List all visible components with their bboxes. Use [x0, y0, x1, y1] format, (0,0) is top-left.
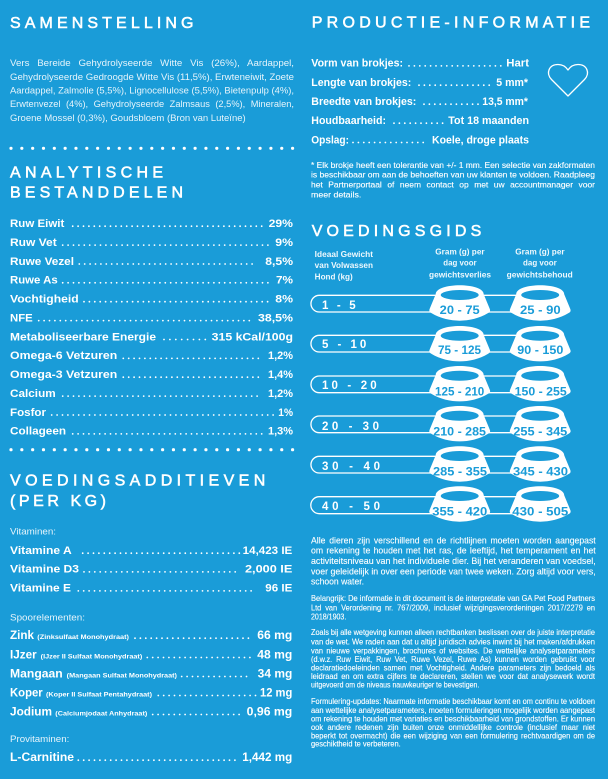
row: zink: (Zinksulfaat Monohydraat): [37, 634, 129, 641]
subheading: spoorelementen: Spoorelementen:: [10, 611, 85, 622]
row: breedte van brokjes: [311, 96, 529, 108]
row: opslag: Opslag:: [311, 134, 349, 146]
row: mangaan: Mangaan: [10, 666, 63, 680]
panel: voedingsgids: [311, 223, 573, 522]
text block: feeding advice: voer geleidelijk in over een periode van twee weken. Zorg altijd voor vers,: [311, 566, 596, 576]
row: 5-10 kg: [311, 326, 571, 361]
text block: legal notice: 2018/1903.: [311, 612, 346, 621]
row: jodium: Jodium: [10, 704, 52, 718]
row: houdbaarheid: Houdbaarheid:: [311, 115, 386, 127]
text block: feeding advice: Alle dieren zijn verschillend en de richtlijnen moeten worden aangepast: [311, 535, 596, 545]
row: opslag: Koele, droge plaats: [432, 134, 529, 146]
icon: heart kibble shape: [549, 64, 587, 96]
heading: samenstelling: SAMENSTELLING: [10, 15, 194, 32]
row: koper: (Koper II Sulfaat Pentahydraat): [46, 691, 152, 698]
row: ruw vet: [10, 237, 293, 249]
row: metaboliseerbare energie: 315 kCal/100g: [212, 331, 293, 343]
text block: feeding advice: om rekening te houden met het ras, de leeftijd, het temperament en het: [311, 546, 596, 556]
subheading: provitaminen: Provitaminen:: [10, 733, 69, 744]
heading: voedingsadditieven per kg: [10, 473, 265, 510]
row: ruw vet: Ruw Vet: [10, 237, 57, 249]
row: omega-6 vetzuren: 1,2%: [268, 350, 293, 362]
footnote: tolerance: * Elk brokje heeft een tolerantie van +/- 1 mm. Een selectie van zakformaten: [311, 161, 595, 170]
row: fosfor: Fosfor: [10, 407, 47, 419]
text block: legislation: leidraad en om extra cijfers te declareren, stellen we voor dat analysewerk wordt: [311, 672, 596, 681]
text block: formulation updates: beperkt tot overmacht) die een wijziging van een formulering rechtvaardigen om de: [311, 731, 596, 740]
row: jodium: 0,96 mg: [247, 704, 292, 718]
column header: weight loss: dag voor: [443, 258, 477, 267]
row: ruw vet: 9%: [275, 237, 293, 249]
text block: formulation updates: geschiktheid te verbeteren.: [311, 740, 401, 749]
row: ijzer: [10, 647, 292, 661]
column header: weight maintenance: Gram (g) per: [515, 247, 565, 256]
ingredients text: Gehydrolyseerde Gedroogde Witte Vis (11,5%), Erwteneiwit, Zoete: [10, 72, 294, 83]
row: mangaan: 34 mg: [258, 666, 292, 680]
text block: feeding advice: [311, 535, 596, 586]
row: koper: 12 mg: [260, 685, 292, 699]
row: 40-50 kg: 40 - 50: [322, 501, 380, 513]
row: vorm van brokjes: Hart: [506, 58, 529, 70]
panel: samenstelling: [10, 15, 294, 124]
row: vochtigheid: 8%: [275, 294, 293, 306]
row: 1-5 kg: 25 - 90: [520, 303, 561, 317]
row: ruwe vezel: [10, 256, 293, 268]
text block: legislation: van de wet. We raden aan dat u altijd juridisch advies inwint bij het maken/afdrukken: [311, 637, 595, 646]
row: 1-5 kg: 20 - 75: [440, 303, 480, 317]
panel: productie-informatie: [311, 15, 595, 200]
row: 30-40 kg: 30 - 40: [322, 461, 380, 473]
heading: voedingsgids: VOEDINGSGIDS: [312, 223, 481, 240]
row: ruw eiwit: 29%: [269, 218, 293, 230]
row: vitamine d3: 2,000 IE: [245, 564, 293, 576]
row: vochtigheid: [10, 294, 293, 306]
column header: weight loss: [429, 247, 492, 279]
row: nfe: 38,5%: [258, 312, 293, 324]
column header: weight loss: gewichtsverlies: [429, 270, 492, 279]
row: l-carnitine: L-Carnitine: [10, 750, 74, 764]
row: vitamine e: Vitamine E: [10, 583, 71, 595]
row: ruw eiwit: Ruw Eiwit: [10, 218, 65, 230]
row: zink: 66 mg: [257, 628, 292, 642]
row: omega-3 vetzuren: 1,4%: [268, 369, 293, 381]
row: 20-30 kg: 210 - 285: [433, 424, 486, 438]
row: ruw eiwit: [10, 218, 293, 230]
row: 10-20 kg: [311, 366, 571, 401]
row: 1-5 kg: [311, 285, 571, 321]
row: 5-10 kg: 75 - 125: [438, 343, 481, 357]
text block: legal notice: Belangrijk: De informatie in dit document is de interpretatie van GA Pet Food Partners: [311, 594, 595, 603]
row: 20-30 kg: 255 - 345: [513, 424, 568, 438]
text block: formulation updates: [311, 697, 596, 749]
row: metaboliseerbare energie: [10, 331, 293, 343]
ingredients text: Vers Bereide Gehydrolyseerde Witte Vis (26%), Aardappel,: [10, 58, 294, 69]
footnote: tolerance: het Partnerportaal of neem contact op met uw accountmanager voor: [311, 181, 595, 190]
footnote: tolerance: is beschikbaar om aan de behoeften van uw klanten te voldoen. Raadpleeg: [311, 171, 595, 180]
row: 5-10 kg: 5 - 10: [322, 339, 366, 351]
row: collageen: Collageen: [10, 426, 66, 438]
row: omega-3 vetzuren: [10, 369, 293, 381]
column header: weight maintenance: dag voor: [523, 258, 557, 267]
row: ijzer: (IJzer II Sulfaat Monohydraat): [41, 653, 142, 660]
row: ruwe vezel: 8,5%: [265, 256, 293, 268]
text block: formulation updates: aan wettelijke analysetparameters, moeten formuleringen mogelijk worden aangepast: [311, 706, 596, 715]
column header: weight: van Volwassen: [315, 261, 373, 270]
row: vitamine d3: Vitamine D3: [10, 564, 79, 576]
row: ruwe as: Ruwe As: [10, 275, 58, 287]
row: lengte van brokjes: [311, 77, 529, 89]
column header: weight: Hond (kg): [315, 272, 353, 281]
row: 30-40 kg: [311, 446, 571, 482]
row: collageen: [10, 426, 293, 438]
text block: legislation: uitgevoerd om de niveaus nauwkeuriger te bevestigen.: [311, 680, 479, 689]
row: vitamine e: 96 IE: [265, 583, 293, 595]
row: houdbaarheid: Tot 18 maanden: [448, 115, 529, 127]
column header: weight maintenance: gewichtsbehoud: [507, 270, 573, 279]
column header: weight: Ideaal Gewicht: [315, 250, 373, 259]
row: omega-3 vetzuren: Omega-3 Vetzuren: [10, 369, 117, 381]
ingredients text: [10, 58, 294, 124]
row: 5-10 kg: 90 - 150: [517, 343, 564, 357]
ingredients text: Aardappel, Zalmolie (5,5%), Lignocellulose (5,5%), Bietenpulp (4%),: [10, 86, 294, 96]
row: fosfor: 1%: [278, 407, 293, 419]
row: 40-50 kg: 355 - 420: [432, 504, 488, 518]
text block: formulation updates: om rekening te houden met variaties en beschikbaarheid van grondstoffen. Er kunnen: [311, 714, 595, 723]
row: nfe: [10, 312, 293, 324]
row: breedte van brokjes: Breedte van brokjes:: [311, 96, 416, 108]
column header: weight maintenance: [507, 247, 573, 279]
row: koper: Koper: [10, 685, 43, 699]
column header: weight loss: Gram (g) per: [435, 247, 485, 256]
row: vorm van brokjes: [311, 58, 529, 70]
row: jodium: (Calciumjodaat Anhydraat): [55, 710, 147, 717]
row: omega-6 vetzuren: Omega-6 Vetzuren: [10, 350, 117, 362]
row: vorm van brokjes: Vorm van brokjes:: [311, 58, 403, 70]
text block: formulation updates: ook andere redenen zijn buiten onze onmiddellijke controle (inclusief maar niet: [311, 723, 596, 732]
row: ijzer: 48 mg: [257, 647, 292, 661]
row: fosfor: [10, 407, 293, 419]
row: jodium: [10, 704, 292, 718]
row: 10-20 kg: 150 - 255: [515, 384, 567, 398]
row: 1-5 kg: 1 - 5: [322, 300, 356, 312]
subheading: vitaminen: Vitaminen:: [10, 526, 56, 537]
row: vochtigheid: Vochtigheid: [10, 294, 79, 306]
heading: analytische bestanddelen: BESTANDDELEN: [10, 184, 183, 202]
row: ruwe vezel: Ruwe Vezel: [10, 256, 74, 268]
text block: feeding advice: activiteitsniveau van het individuele dier. Bij het veranderen van voedsel,: [311, 556, 596, 566]
heading: voedingsadditieven per kg: VOEDINGSADDITIEVEN: [10, 473, 265, 490]
row: nfe: NFE: [10, 312, 33, 324]
row: mangaan: [10, 666, 292, 680]
row: vitamine a: 14,423 IE: [243, 545, 293, 557]
footnote: tolerance: [311, 161, 595, 200]
row: houdbaarheid: [311, 115, 529, 127]
heading: analytische bestanddelen: ANALYTISCHE: [10, 164, 163, 182]
row: vitamine a: Vitamine A: [10, 545, 72, 557]
row: lengte van brokjes: Lengte van brokjes:: [311, 77, 411, 89]
row: omega-6 vetzuren: [10, 350, 293, 362]
row: 20-30 kg: [311, 406, 571, 441]
row: koper: [10, 685, 292, 699]
row: calcium: [10, 388, 293, 400]
row: opslag: [311, 134, 529, 146]
row: ruwe as: [10, 275, 293, 287]
panel: voedingsadditieven: [10, 473, 293, 764]
row: zink: Zink: [10, 628, 34, 642]
row: calcium: 1,2%: [268, 388, 293, 400]
text block: feeding advice: schoon water.: [311, 576, 364, 586]
row: mangaan: (Mangaan Sulfaat Monohydraat): [67, 672, 177, 679]
text block: legislation: declaratiedoeleinden samen met Vochtigheid. Andere parameters zijn bedoeld als: [311, 663, 595, 672]
row: breedte van brokjes: 13,5 mm*: [482, 96, 529, 108]
ingredients text: Erwtenvezel (4%), Gehydrolyseerde Zalmsaus (2,5%), Mineralen,: [10, 99, 294, 110]
row: 20-30 kg: 20 - 30: [322, 421, 379, 433]
footnote: tolerance: meer details.: [311, 191, 361, 200]
row: calcium: Calcium: [10, 388, 56, 400]
heading: analytische bestanddelen: [10, 164, 183, 202]
row: metaboliseerbare energie: Metaboliseerbare Energie: [10, 331, 156, 343]
row: 30-40 kg: 345 - 430: [513, 464, 568, 478]
row: 10-20 kg: 125 - 210: [435, 384, 485, 398]
column header: weight: [315, 250, 373, 281]
ingredients text: Groene Mossel (0,3%), Goudsbloem (Bron van Luteïne): [10, 113, 246, 124]
row: vitamine d3: [10, 564, 293, 576]
text block: legal notice: [311, 594, 595, 621]
panel: analytische bestanddelen: [10, 164, 293, 438]
row: 30-40 kg: 285 - 355: [433, 464, 487, 478]
heading: productie-informatie: PRODUCTIE-INFORMATIE: [312, 15, 590, 32]
row: l-carnitine: [10, 750, 292, 764]
row: 40-50 kg: 430 - 505: [512, 504, 569, 518]
row: 40-50 kg: [311, 486, 571, 522]
row: collageen: 1,3%: [268, 426, 293, 438]
row: ruwe as: 7%: [276, 275, 293, 287]
row: l-carnitine: 1,442 mg: [242, 750, 292, 764]
row: vitamine a: [10, 545, 293, 557]
row: ijzer: IJzer: [10, 647, 37, 661]
row: zink: [10, 628, 292, 642]
row: lengte van brokjes: 5 mm*: [496, 77, 529, 89]
heading: voedingsadditieven per kg: (PER KG): [10, 493, 106, 510]
text block: legislation: [311, 628, 596, 689]
row: 10-20 kg: 10 - 20: [322, 380, 377, 392]
row: vitamine e: [10, 583, 293, 595]
